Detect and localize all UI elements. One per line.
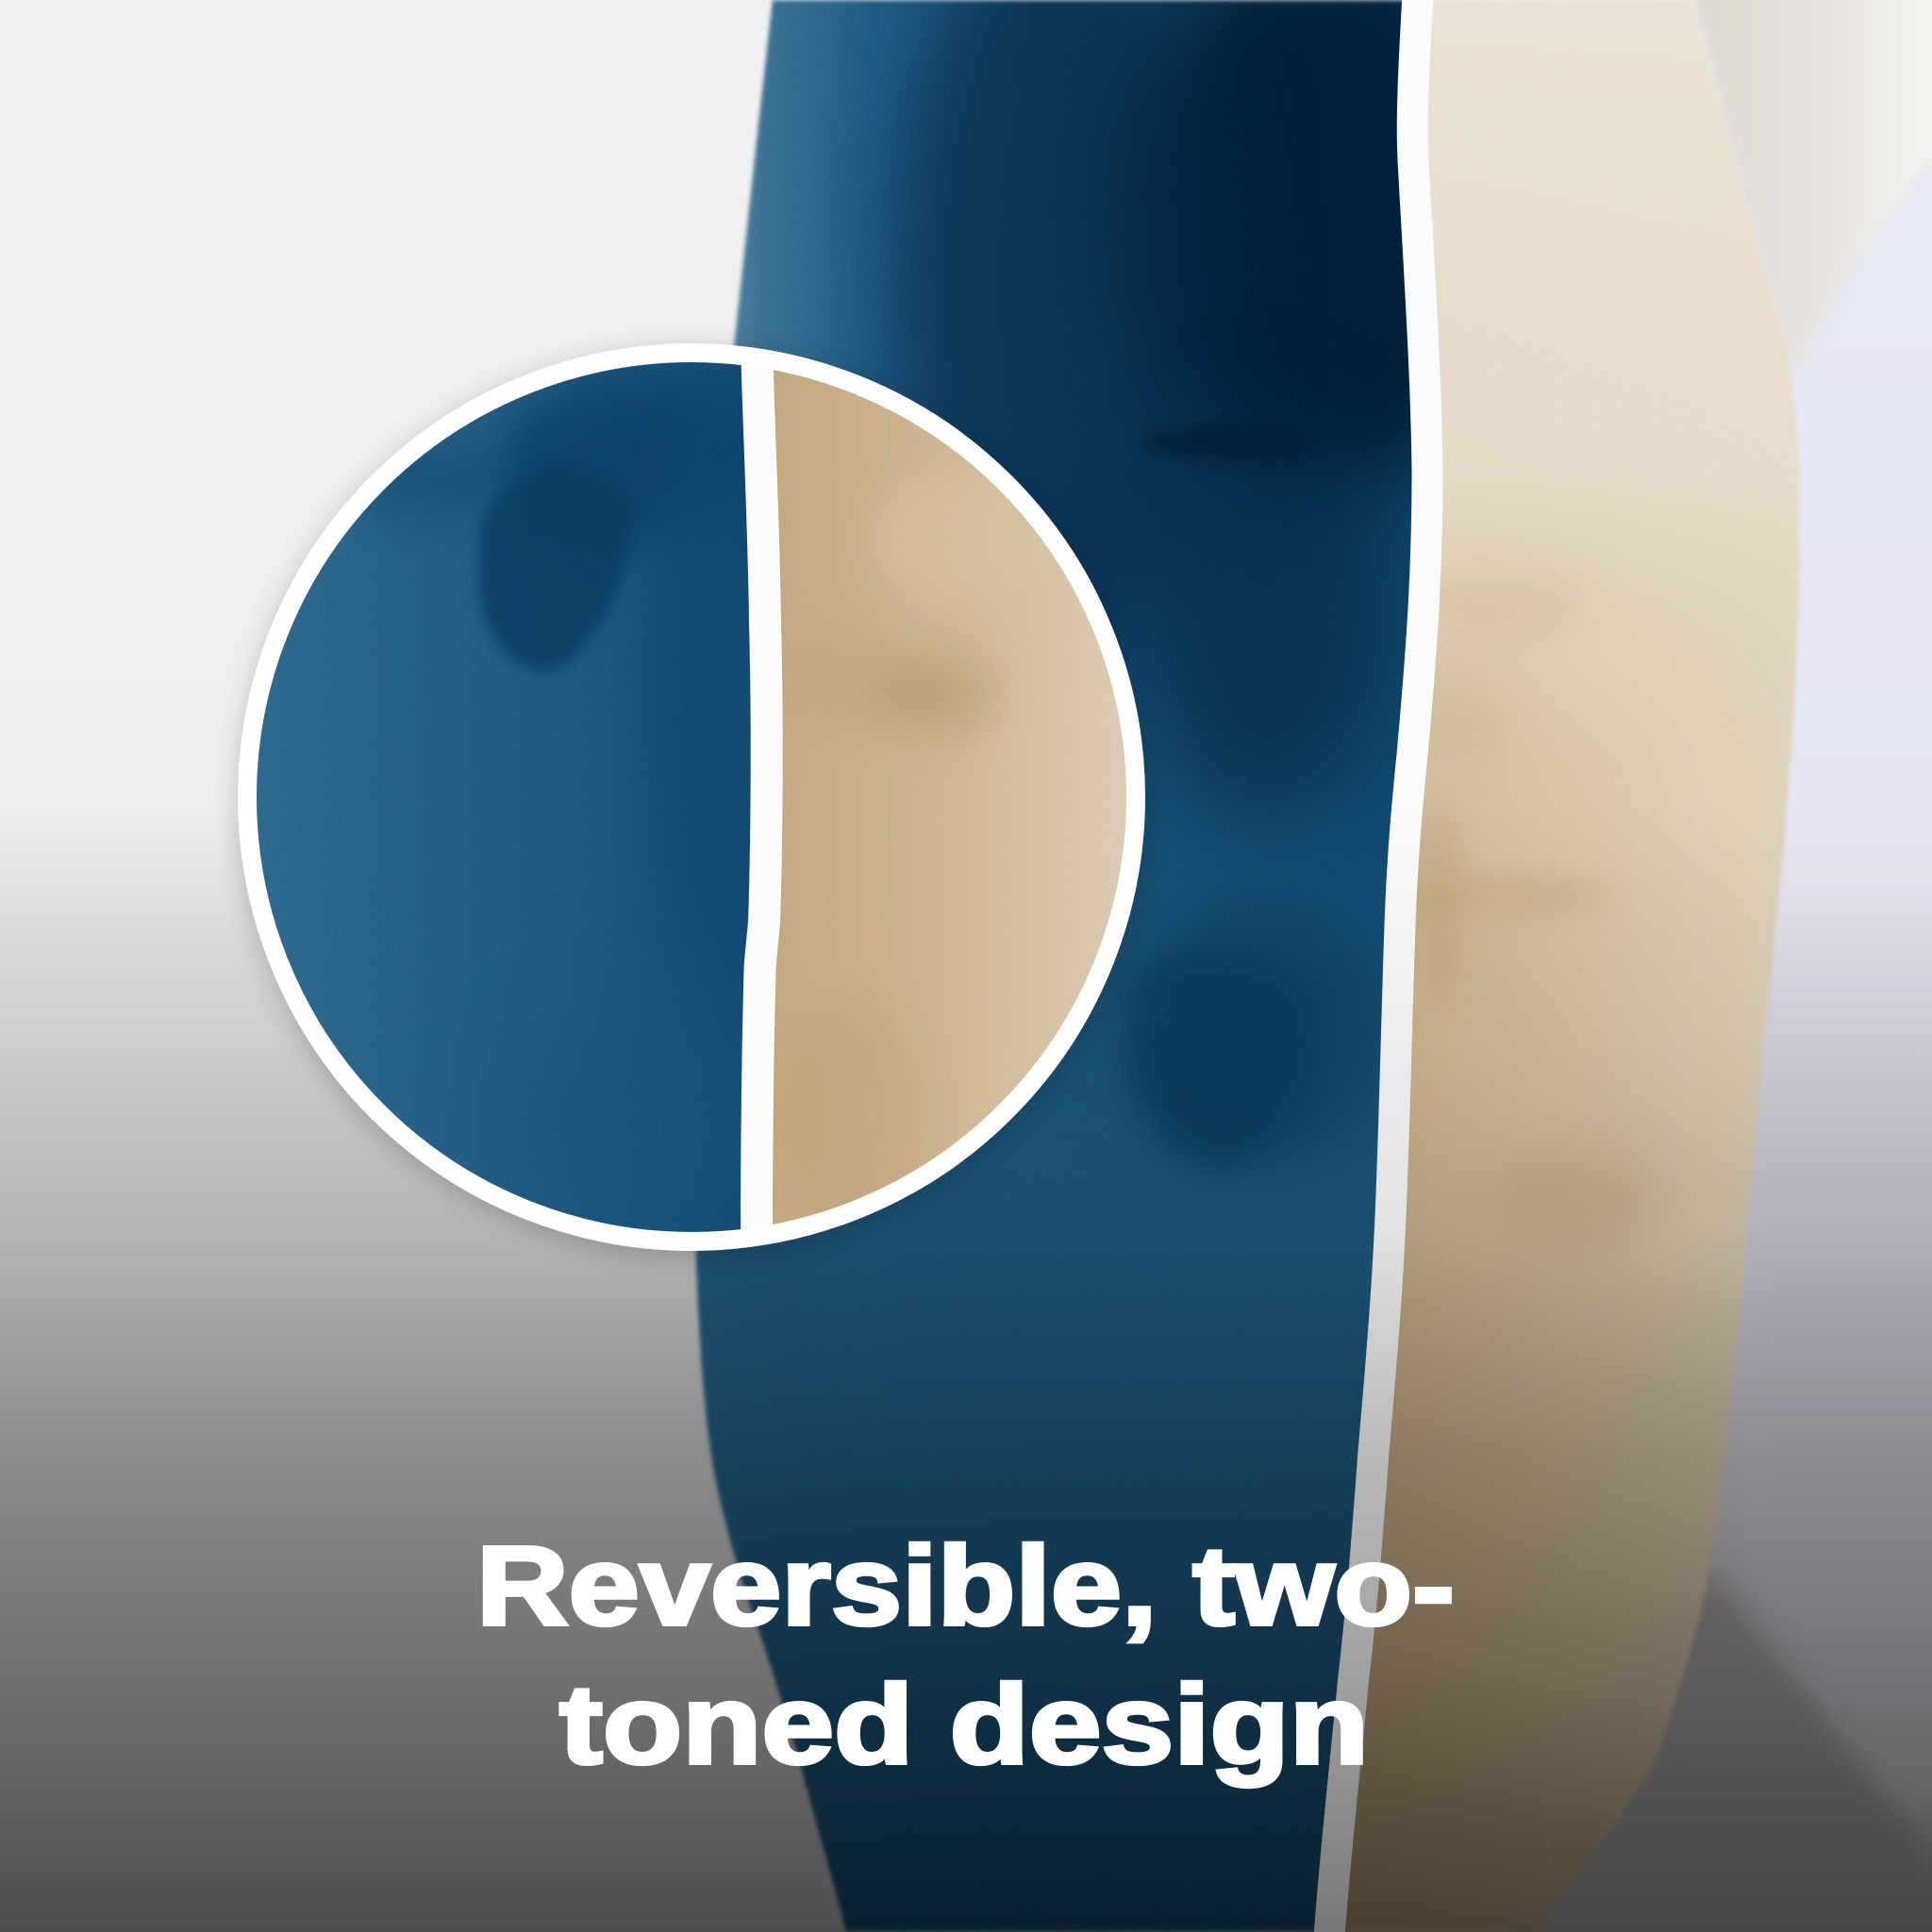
caption line 2: toned design (559, 1662, 1369, 1788)
magnifier white ring (247, 353, 1136, 1241)
magnifier shadow (238, 348, 1145, 1256)
pillow: white piping seam (1329, 0, 1427, 1932)
magnifier circle: fabric close-up (245, 344, 1136, 1259)
close-up: beige velvet (773, 370, 1126, 1224)
caption line 1: Reversible, two- (476, 1524, 1455, 1649)
close-up: navy velvet (257, 362, 751, 1232)
pillow: beige velvet side (1345, 0, 1802, 1932)
close-up: white piping (757, 344, 767, 1259)
pillow: navy velvet side (692, 0, 1411, 1932)
caption heading (476, 1524, 1455, 1788)
